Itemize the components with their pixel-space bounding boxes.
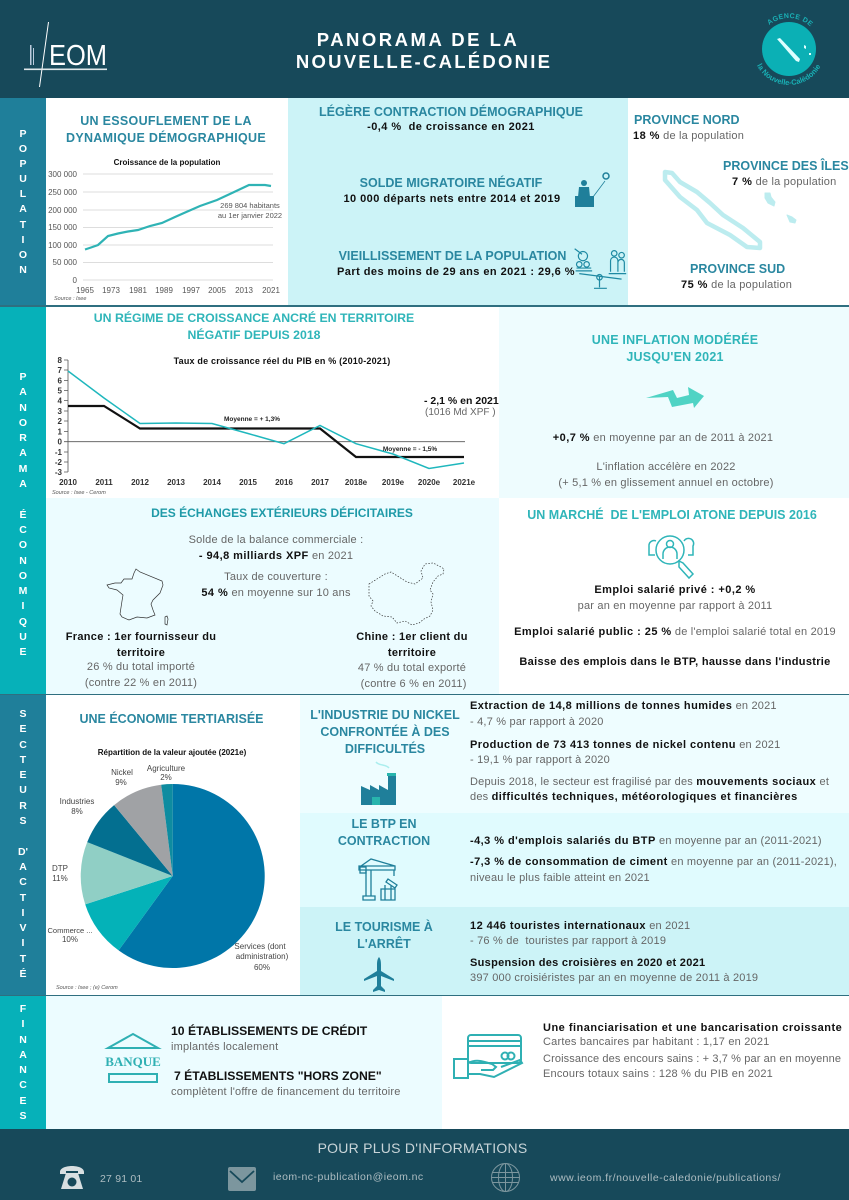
heading: tourisme xyxy=(335,920,433,951)
side tab: panorama économique: N xyxy=(19,402,27,414)
heading: essoufflement: UN ESSOUFLEMENT DE LA xyxy=(80,114,252,128)
side tab: secteurs d'activité: E xyxy=(19,769,26,781)
icon: mail xyxy=(228,1167,256,1191)
text: ciment: -7,3 % de consommation de ciment en moyenne par an (2011-2021), xyxy=(470,856,837,868)
side tab: population: L xyxy=(20,188,26,200)
pie chart: value added: Commerce ... xyxy=(47,926,93,935)
pie chart: value added xyxy=(47,748,289,991)
map: Nouvelle-Calédonie xyxy=(662,170,796,250)
text: difficultés: des difficultés techniques, météorologiques et financières xyxy=(470,791,798,803)
side tab: finances xyxy=(0,996,46,1129)
text: extraction change: - 4,7 % par rapport à 2020 xyxy=(470,716,604,728)
heading: économie tertiarisée: UNE ÉCONOMIE TERTIARISÉE xyxy=(79,712,264,726)
icon: factory xyxy=(361,762,396,805)
divider band xyxy=(0,305,849,307)
side tab: panorama économique: M xyxy=(19,463,27,475)
text: France shares xyxy=(85,661,197,689)
text: balance commerciale: - 94,8 milliards XPF en 2021 xyxy=(199,550,353,562)
heading: inflation: JUSQU'EN 2021 xyxy=(626,350,724,364)
heading: BTP xyxy=(338,817,430,848)
side tab: secteurs d'activité: A xyxy=(19,861,27,873)
text: ciment: niveau le plus faible atteint en 2021 xyxy=(470,872,650,884)
logo: Agence de la Nouvelle-Calédonie: la Nouvelle-Calédonie xyxy=(757,63,820,85)
icon: balance xyxy=(574,248,626,289)
side tab: secteurs d'activité: E xyxy=(19,723,26,735)
text: France shares: 26 % du total importé xyxy=(87,661,195,673)
line chart: population: 100 000 xyxy=(48,241,78,250)
text: phone: 27 91 01 xyxy=(100,1173,142,1185)
text: France: territoire xyxy=(117,647,165,659)
divider band xyxy=(0,995,849,996)
logo: Agence de la Nouvelle-Calédonie: AGENCE DE xyxy=(768,13,813,26)
text: Chine shares: 47 % du total exporté xyxy=(358,662,466,674)
text: implantés: implantés localement xyxy=(171,1041,278,1053)
panel: banks xyxy=(46,996,442,1129)
side tab: secteurs d'activité: É xyxy=(19,968,26,980)
text: établissements de crédit: 10 ÉTABLISSEMENTS DE CRÉDIT xyxy=(171,1024,367,1038)
icon: globe xyxy=(491,1163,520,1192)
text: financiarisation: Une financiarisation et une bancarisation croissante xyxy=(543,1022,842,1034)
icon: map of China xyxy=(368,562,444,626)
line chart: GDP: 2018e xyxy=(345,478,368,487)
line chart: population: 2013 xyxy=(235,286,253,295)
line chart: GDP: Moyenne = + 1,3% xyxy=(224,416,280,423)
heading: essoufflement xyxy=(66,114,266,145)
heading: inflation xyxy=(592,332,758,364)
province nord value: 18 % de la population xyxy=(633,130,744,142)
side tab: finances: N xyxy=(19,1034,27,1046)
line chart: population: 300 000 xyxy=(48,170,78,179)
line chart: population: 2021 xyxy=(262,286,280,295)
side tab: finances: I xyxy=(22,1018,24,1030)
heading: échanges: DES ÉCHANGES EXTÉRIEURS DÉFICITAIRES xyxy=(151,506,413,520)
heading: vieillissement: VIEILLISSEMENT DE LA POPULATION xyxy=(339,249,566,263)
text: croisières: Suspension des croisières en 2020 et 2021 xyxy=(470,957,705,969)
line chart: GDP: -2 xyxy=(55,458,63,467)
heading: tourisme: L'ARRÊT xyxy=(357,937,411,951)
pie chart: value added: Industries xyxy=(60,797,94,806)
side tab: population: O xyxy=(19,249,27,261)
panel: nickel xyxy=(300,695,849,813)
text: touristes change: - 76 % de touristes par rapport à 2019 xyxy=(470,935,666,947)
text: France shares: (contre 22 % en 2011) xyxy=(85,677,197,689)
text: emploi privé: par an en moyenne par rapport à 2011 xyxy=(578,600,772,612)
side tab: secteurs d'activité: T xyxy=(20,892,26,904)
panel: population growth xyxy=(46,98,288,305)
text: inflation 2022 xyxy=(558,461,774,489)
pie chart: value added: Nickel xyxy=(111,768,133,777)
side tab: secteurs d'activité: I xyxy=(22,937,24,949)
footer xyxy=(0,1129,849,1200)
text: emploi privé: Emploi salarié privé : +0,2 % xyxy=(594,584,756,596)
line chart: population: au 1er janvier 2022 xyxy=(218,211,282,220)
side tab: secteurs d'activité xyxy=(0,695,46,996)
pie chart: value added: 2% xyxy=(160,773,172,782)
side tab: secteurs d'activité: U xyxy=(19,784,27,796)
line chart: population: 0 xyxy=(73,276,78,285)
icon: map of France xyxy=(106,568,168,626)
text: hors zone: 7 ÉTABLISSEMENTS "HORS ZONE" xyxy=(174,1069,382,1083)
logo: Agence de la Nouvelle-Calédonie xyxy=(757,13,820,85)
province nord: PROVINCE NORD xyxy=(634,113,740,127)
line chart: GDP: 5 xyxy=(58,386,63,396)
text: départs: 10 000 départs nets entre 2014 et 2019 xyxy=(343,193,561,205)
pie chart: value added: 10% xyxy=(62,935,78,944)
side tab: finances: A xyxy=(19,1049,27,1061)
side tab: population: P xyxy=(19,128,26,140)
side tab: panorama économique: A xyxy=(19,386,27,398)
heading: nickel xyxy=(310,708,460,756)
icon: card in hand xyxy=(453,1034,525,1080)
side tab: panorama économique: Q xyxy=(19,616,27,628)
line chart: GDP: 2 xyxy=(58,417,63,426)
side tab: population: P xyxy=(19,158,26,170)
line chart: GDP: 2013 xyxy=(167,478,185,487)
side tab: panorama économique: P xyxy=(19,371,26,383)
line chart: GDP: 2017 xyxy=(311,478,329,487)
heading: nickel: DIFFICULTÉS xyxy=(345,742,425,756)
text: encours: Croissance des encours sains : + 3,7 % par an en moyenne xyxy=(543,1053,841,1065)
side tab: population: A xyxy=(19,203,27,215)
side tab: panorama économique: R xyxy=(19,432,27,444)
text: fragilisé: Depuis 2018, le secteur est fragilisé par des mouvements sociaux et xyxy=(470,776,829,788)
panel: GDP growth xyxy=(46,307,499,498)
text: taux de couverture: 54 % en moyenne sur 10 ans xyxy=(201,587,351,599)
line chart: GDP: 2010 xyxy=(59,478,77,487)
side tab: panorama économique: O xyxy=(19,539,27,551)
line chart: population: 269 804 habitants xyxy=(220,201,280,210)
side tab: panorama économique: A xyxy=(19,447,27,459)
side tab: secteurs d'activité: T xyxy=(20,754,26,766)
line chart: GDP: 2019e xyxy=(382,478,405,487)
text: moins de 29 ans: Part des moins de 29 ans en 2021 : 29,6 % xyxy=(337,266,575,278)
heading: régime de croissance xyxy=(94,311,414,342)
pie chart: value added: administration) xyxy=(236,952,289,961)
text: emploi privé xyxy=(578,584,772,612)
side tab: panorama économique: É xyxy=(19,509,26,521)
text: ciment xyxy=(470,856,837,884)
heading: tourisme: LE TOURISME À xyxy=(335,920,433,934)
icon: bank: BANQUE xyxy=(105,1054,161,1069)
text: cartes: Cartes bancaires par habitant : 1,17 en 2021 xyxy=(543,1036,770,1048)
side tab: population: I xyxy=(22,234,24,246)
side tab: panorama économique: N xyxy=(19,555,27,567)
side tab: secteurs d'activité: T xyxy=(20,953,26,965)
heading: BTP: LE BTP EN xyxy=(351,817,417,831)
line chart: GDP: 2014 xyxy=(203,478,221,487)
text: extraction: Extraction de 14,8 millions de tonnes humides en 2021 xyxy=(470,700,777,712)
side tab: secteurs d'activité: C xyxy=(19,739,27,751)
line chart: GDP: 2016 xyxy=(275,478,293,487)
side tab: panorama économique: U xyxy=(19,631,27,643)
line chart: GDP: 2020e xyxy=(418,478,441,487)
text: +0,7 %: +0,7 % en moyenne par an de 2011 à 2021 xyxy=(553,432,773,444)
heading: inflation: UNE INFLATION MODÉRÉE xyxy=(592,333,758,347)
side tab: finances: S xyxy=(19,1110,26,1122)
logo: IEOM: EOM xyxy=(49,40,107,72)
text: emploi public: Emploi salarié public : 25 % de l'emploi salarié total en 2019 xyxy=(514,626,836,638)
line chart: GDP: 2011 xyxy=(95,478,113,487)
icon: crane xyxy=(358,858,398,901)
line chart: population: 1989 xyxy=(155,286,173,295)
line chart: GDP: 1 xyxy=(58,428,63,436)
panel: tertiary economy xyxy=(46,695,300,996)
pie chart: value added: Agriculture xyxy=(147,764,186,773)
panel: employment xyxy=(499,498,849,694)
line chart: GDP: 3 xyxy=(58,407,63,416)
side tab: finances: N xyxy=(19,1064,27,1076)
line chart: GDP: 2021e xyxy=(453,478,476,487)
heading: emploi: UN MARCHÉ DE L'EMPLOI ATONE DEPUIS 2016 xyxy=(527,508,817,522)
line chart: GDP: Moyenne = - 1,5% xyxy=(383,446,437,453)
line chart: population: 1973 xyxy=(102,286,120,295)
side tab: secteurs d'activité: V xyxy=(19,922,26,934)
side tab: finances: F xyxy=(20,1003,26,1015)
side tab: population: U xyxy=(19,173,27,185)
side tab: panorama économique: O xyxy=(19,417,27,429)
side tab: secteurs d'activité: C xyxy=(19,876,27,888)
header band xyxy=(0,0,849,98)
line chart: GDP xyxy=(52,356,476,496)
side tab: secteurs d'activité: S xyxy=(19,815,26,827)
side tab: secteurs d'activité: S xyxy=(19,708,26,720)
panel: inflation xyxy=(499,307,849,498)
callout: Md XPF: (1016 Md XPF ) xyxy=(425,407,496,418)
side tab: population: T xyxy=(20,219,26,231)
text: BTP: Baisse des emplois dans le BTP, hausse dans l'industrie xyxy=(519,656,831,668)
icon: bank xyxy=(102,1032,164,1084)
text: inflation 2022: L'inflation accélère en 2022 xyxy=(596,461,736,473)
text: -0,4 %: -0,4 % de croissance en 2021 xyxy=(367,121,535,133)
text: croisiéristes: 397 000 croisiéristes par an en moyenne de 2011 à 2019 xyxy=(470,972,758,984)
text: emplois BTP: -4,3 % d'emplois salariés du BTP en moyenne par an (2011-2021) xyxy=(470,835,822,847)
title: PANORAMA DE LA xyxy=(317,29,519,50)
footer heading: POUR PLUS D'INFORMATIONS xyxy=(318,1140,527,1156)
text: France xyxy=(66,631,216,659)
side tab: panorama économique: O xyxy=(19,570,27,582)
text: production: Production de 73 413 tonnes de nickel contenu en 2021 xyxy=(470,739,780,751)
text: touristes: 12 446 touristes internationaux en 2021 xyxy=(470,920,690,932)
side tab: finances: C xyxy=(19,1079,27,1091)
side tab: panorama économique: M xyxy=(19,585,27,597)
side tab: panorama économique: I xyxy=(22,600,24,612)
line chart: GDP: Source : Isee - Cerom xyxy=(52,490,106,496)
text: Chine: territoire xyxy=(388,647,436,659)
text: Chine shares xyxy=(358,662,467,690)
heading: nickel: CONFRONTÉE À DES xyxy=(320,725,450,739)
text: taux de couverture: Taux de couverture : xyxy=(224,571,328,583)
line chart: population: 50 000 xyxy=(53,258,78,267)
line chart: GDP: 0 xyxy=(58,438,63,446)
pie chart: value added: Source : Isee ; (e) Cerom xyxy=(56,985,118,991)
line chart: GDP: 6 xyxy=(58,376,63,386)
side tab: panorama économique: A xyxy=(19,478,27,490)
line chart: population: 1965 xyxy=(76,286,94,295)
line chart: population: 1997 xyxy=(182,286,200,295)
side tab: population: O xyxy=(19,143,27,155)
icon: phone xyxy=(59,1165,85,1191)
text: inflation 2022: (+ 5,1 % en glissement annuel en octobre) xyxy=(558,477,774,489)
side tab: secteurs d'activité: I xyxy=(22,907,24,919)
icon: migrant with suitcases xyxy=(575,172,610,207)
line chart: GDP: 4 xyxy=(58,396,63,406)
heading: essoufflement: DYNAMIQUE DÉMOGRAPHIQUE xyxy=(66,131,266,145)
heading: BTP: CONTRACTION xyxy=(338,834,430,848)
pie chart: value added: 8% xyxy=(71,807,83,816)
icon: arrow xyxy=(646,387,704,408)
line chart: GDP: 2015 xyxy=(239,478,257,487)
title xyxy=(296,29,552,72)
icon: magnifier people xyxy=(648,535,694,580)
province sud value: 75 % de la population xyxy=(681,279,792,291)
text: website: www.ieom.fr/nouvelle-caledonie/publications/ xyxy=(550,1172,781,1184)
callout: -2,1 %: - 2,1 % en 2021 xyxy=(424,395,499,407)
line chart: population: 150 000 xyxy=(48,223,78,232)
pie chart: value added: DTP xyxy=(52,864,68,873)
panel: BTP xyxy=(300,813,849,907)
panel: external trade xyxy=(46,498,499,694)
line chart: population: Croissance de la population xyxy=(114,158,220,167)
side tab: panorama économique: E xyxy=(19,646,26,658)
heading: solde migratoire: SOLDE MIGRATOIRE NÉGATIF xyxy=(360,176,542,190)
line chart: GDP: 2012 xyxy=(131,478,149,487)
text: encours totaux: Encours totaux sains : 128 % du PIB en 2021 xyxy=(543,1068,773,1080)
text: balance commerciale xyxy=(189,534,363,562)
side tab: panorama économique xyxy=(0,307,46,694)
pie chart: value added: 9% xyxy=(115,778,127,787)
panel: tourism xyxy=(300,907,849,996)
heading: nickel: L'INDUSTRIE DU NICKEL xyxy=(310,708,460,722)
line chart: population xyxy=(48,158,282,302)
text: Chine: Chine : 1er client du xyxy=(356,631,468,643)
heading: régime de croissance: NÉGATIF DEPUIS 2018 xyxy=(187,328,321,342)
pie chart: value added: 60% xyxy=(254,963,270,972)
line chart: population: 2005 xyxy=(208,286,226,295)
side tab: population: N xyxy=(19,264,27,276)
line chart: GDP: 8 xyxy=(58,356,63,365)
side tab: secteurs d'activité: R xyxy=(19,800,27,812)
province sud: PROVINCE SUD xyxy=(690,262,785,276)
panel: provinces xyxy=(628,98,849,305)
pie chart: value added: 11% xyxy=(52,874,68,883)
text: balance commerciale: Solde de la balance commerciale : xyxy=(189,534,363,546)
side tab: population xyxy=(0,98,46,305)
heading: régime de croissance: UN RÉGIME DE CROISSANCE ANCRÉ EN TERRITOIRE xyxy=(94,311,414,325)
icon: plane xyxy=(363,957,395,993)
pie chart: value added: Services (dont xyxy=(234,942,286,951)
line chart: population: 1981 xyxy=(129,286,147,295)
line chart: GDP: Taux de croissance réel du PIB en % (2010-2021) xyxy=(174,356,390,366)
text: taux de couverture xyxy=(201,571,351,599)
line chart: population: 250 000 xyxy=(48,188,78,197)
side tab: panorama économique: C xyxy=(19,524,27,536)
title: NOUVELLE-CALÉDONIE xyxy=(296,51,552,72)
line chart: population: 200 000 xyxy=(48,206,78,215)
panel: bancarisation xyxy=(442,996,849,1129)
province des iles: PROVINCE DES ÎLES xyxy=(723,159,849,173)
line chart: GDP: 7 xyxy=(58,366,63,375)
iles value: 7 % de la population xyxy=(732,176,836,188)
side tab: secteurs d'activité: D' xyxy=(18,846,28,858)
side tab: finances: E xyxy=(19,1095,26,1107)
pie chart: value added: Répartition de la valeur ajoutée (2021e) xyxy=(98,748,247,757)
text: production change: - 19,1 % par rapport à 2020 xyxy=(470,754,610,766)
text: email: ieom-nc-publication@ieom.nc xyxy=(273,1171,424,1183)
text: Chine shares: (contre 6 % en 2011) xyxy=(361,678,467,690)
heading: contraction: LÉGÈRE CONTRACTION DÉMOGRAPHIQUE xyxy=(319,105,583,119)
text: France: France : 1er fournisseur du xyxy=(66,631,216,643)
line chart: population: Source : Isee xyxy=(54,296,86,302)
divider band xyxy=(0,694,849,695)
panel: demography xyxy=(288,98,628,305)
line chart: GDP: -1 xyxy=(55,448,63,457)
logo: IEOM xyxy=(24,22,107,87)
text: Chine xyxy=(356,631,468,659)
line chart: GDP: -3 xyxy=(55,468,63,477)
text: complètent: complètent l'offre de financement du territoire xyxy=(171,1086,401,1098)
